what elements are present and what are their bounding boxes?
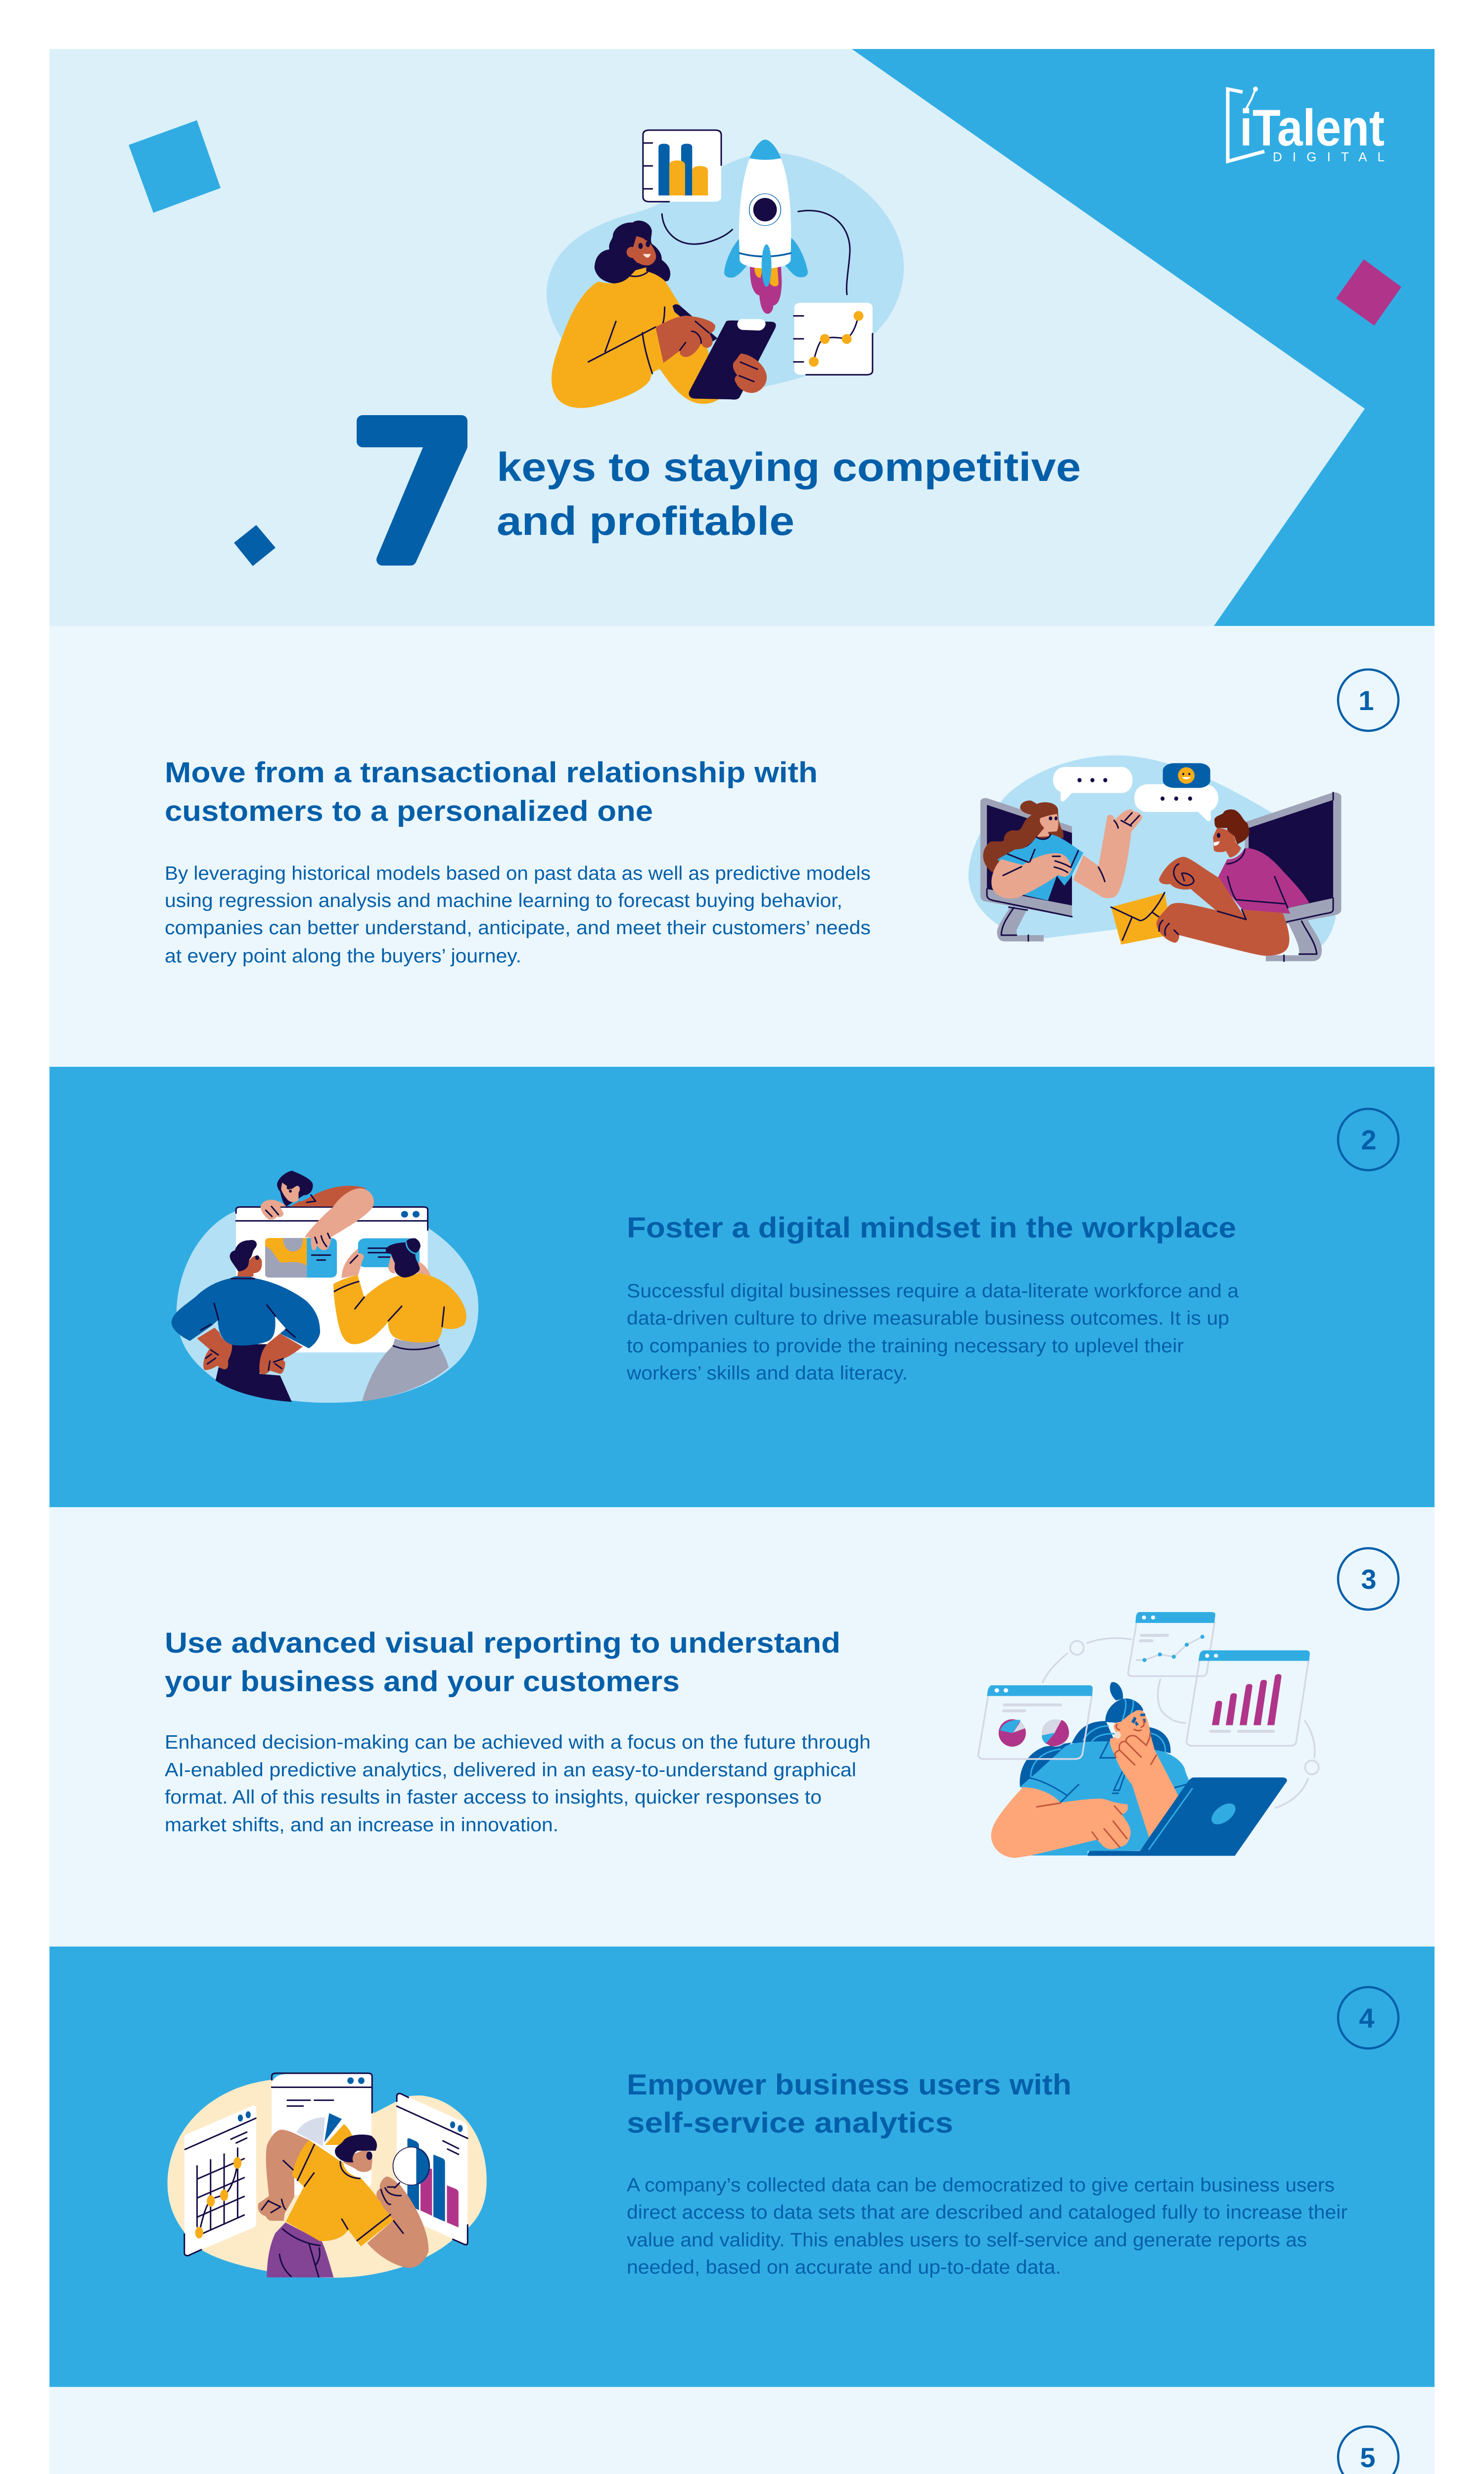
number badge 5: [1338, 2426, 1398, 2474]
title: keys to staying competitive: [497, 445, 1081, 490]
decorative light blue diamond: [129, 120, 221, 213]
woman: [552, 221, 776, 408]
orbit lines: [1043, 1638, 1319, 1808]
heading 4: [627, 2069, 1071, 2139]
body text 1: companies can better understand, anticipate, and meet their customers’ needs: [165, 917, 871, 939]
body text 3: [165, 1732, 871, 1836]
body text 1: [165, 863, 871, 967]
chat woman: [983, 801, 1142, 901]
heading 3: [165, 1627, 840, 1698]
number badge 2: 2: [1361, 1124, 1377, 1155]
body text 1: using regression analysis and machine learning to forecast buying behavior,: [165, 890, 842, 911]
heading 3: your business and your customers: [165, 1665, 680, 1698]
left chart window: [185, 2105, 256, 2256]
heading 1: customers to a personalized one: [165, 795, 653, 827]
line chart card: [794, 303, 873, 375]
decorative dark blue diamond: [234, 525, 276, 566]
body text 4: needed, based on accurate and up-to-date data.: [627, 2257, 1061, 2278]
logo: [1228, 87, 1385, 164]
title: [497, 445, 1081, 544]
body text 2: to companies to provide the training necessary to uplevel their: [627, 1335, 1184, 1357]
illustration: man inspecting charts: [168, 2073, 487, 2278]
logo: iTalent: [1240, 99, 1385, 157]
panel: key 4: [49, 1947, 1435, 2387]
bar chart dashboard: [1187, 1650, 1310, 1746]
number badge 2: [1338, 1109, 1398, 1170]
header panel: [49, 49, 1435, 626]
laptop: [1088, 1777, 1287, 1856]
body text 4: [627, 2175, 1347, 2278]
body text 4: value and validity. This enables users to self-service and generate reports as: [627, 2230, 1307, 2251]
body text 4: direct access to data sets that are described and cataloged fully to increase their: [627, 2202, 1347, 2223]
rocket: [724, 140, 808, 314]
number badge 4: [1338, 1987, 1398, 2048]
number badge 5: 5: [1360, 2442, 1376, 2473]
hero illustration: woman with rocket: [547, 130, 904, 408]
title: and profitable: [497, 499, 794, 544]
right monitor: [1245, 792, 1341, 961]
heading 1: Move from a transactional relationship with: [165, 757, 818, 789]
panel: key 2: [49, 1067, 1435, 1507]
header blue arrow background: [852, 49, 1435, 626]
heading 4: self-service analytics: [627, 2107, 953, 2139]
thinking woman: [991, 1682, 1190, 1858]
illustration: two people chatting through monitors: [969, 756, 1341, 961]
body text 3: Enhanced decision-making can be achieved with a focus on the future through: [165, 1732, 871, 1753]
right chart window: [397, 2093, 467, 2245]
pie chart dashboard: [978, 1685, 1093, 1759]
body text 2: Successful digital businesses require a data-literate workforce and a: [627, 1281, 1239, 1302]
number badge 3: 3: [1361, 1564, 1377, 1595]
number badge 4: 4: [1359, 2002, 1375, 2034]
body text 2: data-driven culture to drive measurable business outcomes. It is up: [627, 1308, 1229, 1329]
body text 2: workers’ skills and data literacy.: [626, 1363, 908, 1384]
center window with pie: [272, 2073, 372, 2195]
bar chart card: [643, 130, 721, 202]
left monitor: [980, 798, 1072, 942]
number badge 3: [1338, 1548, 1398, 1610]
body text 2: [626, 1281, 1239, 1384]
body text 1: By leveraging historical models based on past data as well as predictive models: [165, 863, 871, 884]
heading 1: [165, 757, 818, 827]
decorative magenta diamond: [1336, 259, 1401, 326]
body text 4: A company’s collected data can be democratized to give certain business users: [627, 2175, 1335, 2196]
body text 3: format. All of this results in faster access to insights, quicker responses to: [165, 1787, 822, 1808]
logo: DIGITAL: [1273, 149, 1385, 164]
woman leaning over window: [261, 1171, 374, 1250]
heading 4: Empower business users with: [627, 2069, 1071, 2101]
chat man: [1157, 809, 1309, 956]
panel: key 5: [49, 2387, 1435, 2474]
chat bubbles: [1053, 763, 1218, 821]
panel: key 3: [49, 1507, 1435, 1947]
browser window: [236, 1206, 428, 1352]
body text 3: AI-enabled predictive analytics, delivered in an easy-to-understand graphical: [165, 1760, 856, 1781]
magnifying man: [258, 2130, 430, 2278]
line chart dashboard: [1128, 1612, 1215, 1676]
man in blue: [172, 1240, 320, 1402]
body text 3: market shifts, and an increase in innovation.: [165, 1814, 558, 1836]
illustration: team at a browser window: [172, 1171, 478, 1403]
number badge 1: [1338, 669, 1398, 731]
number badge 1: 1: [1358, 685, 1374, 716]
panel: key 1: [49, 626, 1435, 1067]
woman in yellow: [333, 1238, 466, 1401]
envelope: [1111, 893, 1169, 945]
heading 2: Foster a digital mindset in the workplace: [627, 1212, 1236, 1244]
big number seven: [363, 421, 462, 560]
body text 1: at every point along the buyers’ journey.: [165, 946, 521, 967]
heading 3: Use advanced visual reporting to understand: [165, 1627, 840, 1659]
illustration: woman with analytic dashboards: [978, 1612, 1319, 1858]
